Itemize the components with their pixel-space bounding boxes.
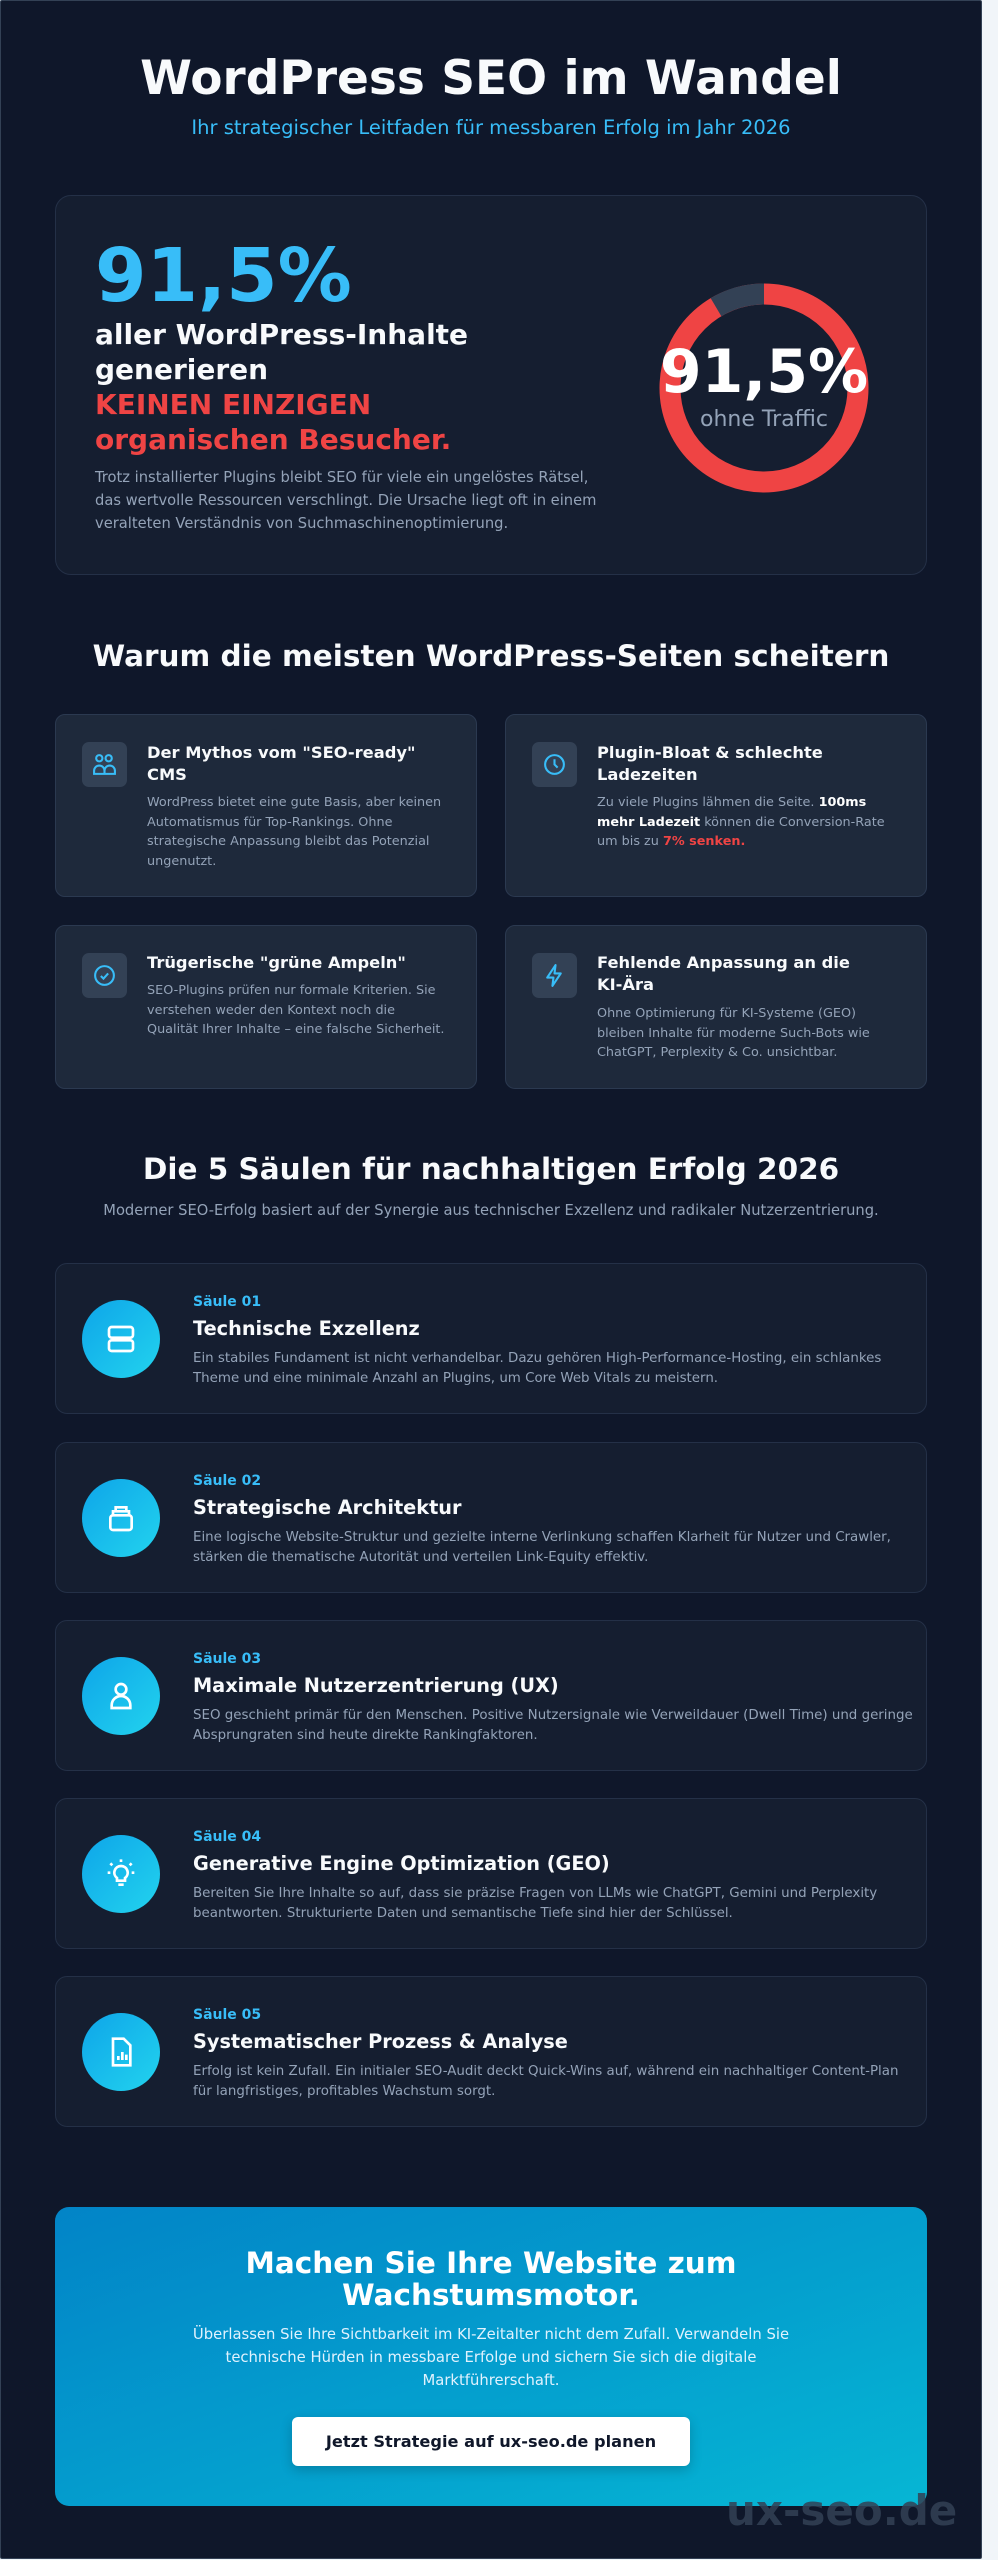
heading: why sites fail: Warum die meisten WordPress-Seiten scheitern bbox=[93, 639, 889, 673]
panel: pillar 5: Systematischer Prozess & Analyse bbox=[193, 2030, 568, 2053]
icon: users bbox=[82, 742, 127, 787]
panel: call to action bbox=[55, 2207, 927, 2506]
icon: clock bbox=[532, 742, 577, 787]
pillars intro: Moderner SEO-Erfolg basiert auf der Synergie aus technischer Exzellenz und radikaler Nutzerzentrierung. bbox=[103, 1202, 879, 1219]
panel: pillar 1: Theme und eine minimale Anzahl an Plugins, um Core Web Vitals zu meistern. bbox=[193, 1371, 718, 1386]
stat headline: generieren bbox=[95, 353, 268, 386]
stat headline bbox=[95, 318, 468, 456]
panel: plugin bloat card: Zu viele Plugins lähmen die Seite. 100ms bbox=[597, 795, 866, 810]
panel: AI era card: bleiben Inhalte für moderne Such-Bots wie bbox=[597, 1026, 870, 1040]
panel: plugin bloat card: mehr Ladezeit können die Conversion-Rate bbox=[597, 814, 885, 830]
panel: myth card: Der Mythos vom "SEO-ready" bbox=[147, 743, 415, 762]
icon: check circle bbox=[82, 953, 127, 998]
panel: AI era card bbox=[505, 925, 927, 1089]
panel: pillar 2: Säule 02 bbox=[193, 1473, 261, 1489]
panel: plugin bloat card bbox=[505, 714, 927, 897]
panel: pillar 1: Ein stabiles Fundament ist nicht verhandelbar. Dazu gehören High-Performance-Hosting, ein schlankes bbox=[193, 1351, 881, 1366]
icon: user bbox=[82, 1657, 160, 1735]
panel: pillar 5: Säule 05 bbox=[193, 2007, 261, 2023]
icon: layers bbox=[82, 1479, 160, 1557]
panel: pillar 4: beantworten. Strukturierte Daten und semantische Tiefe sind hier der Schlüssel. bbox=[193, 1906, 733, 1921]
donut chart bbox=[660, 284, 868, 492]
panel: pillar 4: Bereiten Sie Ihre Inhalte so auf, dass sie präzise Fragen von LLMs wie ChatGPT, Gemini und Perplexity bbox=[193, 1886, 877, 1901]
panel: myth card: WordPress bietet eine gute Basis, aber keinen bbox=[147, 795, 441, 810]
stat description: veralteten Verständnis von Suchmaschinenoptimierung. bbox=[95, 515, 508, 532]
panel: pillar 5: für langfristiges, profitables Wachstum sorgt. bbox=[193, 2084, 495, 2099]
panel: pillar 2: Eine logische Website-Struktur und gezielte interne Verlinkung schaffen Klarheit für Nutzer und Crawler, bbox=[193, 1530, 891, 1545]
panel: pillar 4 bbox=[55, 1798, 927, 1949]
watermark: ux-seo.de bbox=[726, 2486, 957, 2535]
panel: pillar 3 bbox=[55, 1620, 927, 1771]
stat headline: KEINEN EINZIGEN bbox=[95, 388, 371, 421]
icon: lightning bbox=[532, 953, 577, 998]
CTA text: Marktführerschaft. bbox=[423, 2372, 559, 2389]
panel: green lights card: verstehen weder den Kontext noch die bbox=[147, 1002, 395, 1018]
icon: lightbulb bbox=[82, 1835, 160, 1913]
panel: plugin bloat card: um bis zu 7% senken. bbox=[597, 834, 745, 849]
panel: green lights card: Trügerische "grüne Ampeln" bbox=[147, 953, 406, 972]
panel: pillar 2: Strategische Architektur bbox=[193, 1496, 462, 1519]
CTA button: Jetzt Strategie auf ux-seo.de planen bbox=[326, 2432, 656, 2451]
panel: plugin bloat card: Ladezeiten bbox=[597, 765, 698, 784]
stat headline: organischen Besucher. bbox=[95, 423, 451, 456]
panel: myth card: ungenutzt. bbox=[147, 854, 216, 868]
CTA heading: Wachstumsmotor. bbox=[342, 2278, 640, 2312]
CTA button bbox=[292, 2417, 690, 2466]
panel: AI era card: ChatGPT, Perplexity & Co. unsichtbar. bbox=[597, 1045, 837, 1060]
panel: pillar 1 bbox=[55, 1263, 927, 1414]
donut label: 91,5% bbox=[660, 337, 868, 407]
panel: green lights card: SEO-Plugins prüfen nur formale Kriterien. Sie bbox=[147, 983, 436, 998]
panel: myth card: CMS bbox=[147, 765, 187, 784]
panel: myth card bbox=[55, 714, 477, 897]
panel: pillar 3: Absprungraten sind heute direkte Rankingfaktoren. bbox=[193, 1728, 538, 1743]
panel: pillar 4: Generative Engine Optimization (GEO) bbox=[193, 1852, 610, 1875]
panel: plugin bloat card: Plugin-Bloat & schlechte bbox=[597, 743, 823, 762]
icon: server bbox=[82, 1300, 160, 1378]
CTA heading bbox=[245, 2246, 737, 2312]
panel: myth card: Automatismus für Top-Rankings. Ohne bbox=[147, 814, 392, 830]
panel: AI era card: Fehlende Anpassung an die bbox=[597, 953, 850, 972]
stat description: das wertvolle Ressourcen verschlingt. Die Ursache liegt oft in einem bbox=[95, 492, 596, 509]
panel: pillar 4: Säule 04 bbox=[193, 1829, 261, 1845]
big stat number: 91,5% bbox=[95, 233, 352, 319]
panel: pillar 1: Technische Exzellenz bbox=[193, 1317, 420, 1340]
panel: pillar 3: Maximale Nutzerzentrierung (UX) bbox=[193, 1674, 559, 1697]
panel: pillar 2: stärken die thematische Autorität und verteilen Link-Equity effektiv. bbox=[193, 1550, 648, 1565]
panel: green lights card: Qualität Ihrer Inhalte – eine falsche Sicherheit. bbox=[147, 1022, 444, 1037]
heading: five pillars: Die 5 Säulen für nachhaltigen Erfolg 2026 bbox=[143, 1152, 839, 1186]
icon: file chart bbox=[82, 2013, 160, 2091]
CTA heading: Machen Sie Ihre Website zum bbox=[245, 2246, 737, 2280]
panel: myth card: strategische Anpassung bleibt das Potenzial bbox=[147, 834, 429, 849]
panel: pillar 1: Säule 01 bbox=[193, 1294, 261, 1310]
stat headline: aller WordPress-Inhalte bbox=[95, 318, 468, 351]
panel: pillar 5: Erfolg ist kein Zufall. Ein initialer SEO-Audit deckt Quick-Wins auf, während ein nachhaltiger Content-Plan bbox=[193, 2064, 898, 2079]
subtitle: Ihr strategischer Leitfaden für messbaren Erfolg im Jahr 2026 bbox=[191, 116, 791, 139]
panel: pillar 3: Säule 03 bbox=[193, 1651, 261, 1667]
CTA text: technische Hürden in messbare Erfolge und sichern Sie sich die digitale bbox=[226, 2349, 756, 2366]
panel: green lights card bbox=[55, 925, 477, 1089]
panel: hero statistic bbox=[55, 195, 927, 575]
panel: AI era card: Ohne Optimierung für KI-Systeme (GEO) bbox=[597, 1006, 856, 1021]
panel: pillar 3: SEO geschieht primär für den Menschen. Positive Nutzersignale wie Verweildauer (Dwell Time) und geringe bbox=[193, 1708, 913, 1723]
panel: pillar 5 bbox=[55, 1976, 927, 2127]
CTA text: Überlassen Sie Ihre Sichtbarkeit im KI-Zeitalter nicht dem Zufall. Verwandeln Sie bbox=[193, 2326, 789, 2343]
donut chart: ohne Traffic bbox=[700, 407, 828, 432]
stat description: Trotz installierter Plugins bleibt SEO für viele ein ungelöstes Rätsel, bbox=[95, 469, 588, 486]
title: WordPress SEO im Wandel bbox=[140, 51, 842, 106]
panel: pillar 2 bbox=[55, 1442, 927, 1593]
stat description bbox=[94, 469, 596, 532]
panel: AI era card: KI-Ära bbox=[597, 975, 654, 994]
CTA text bbox=[193, 2325, 789, 2389]
